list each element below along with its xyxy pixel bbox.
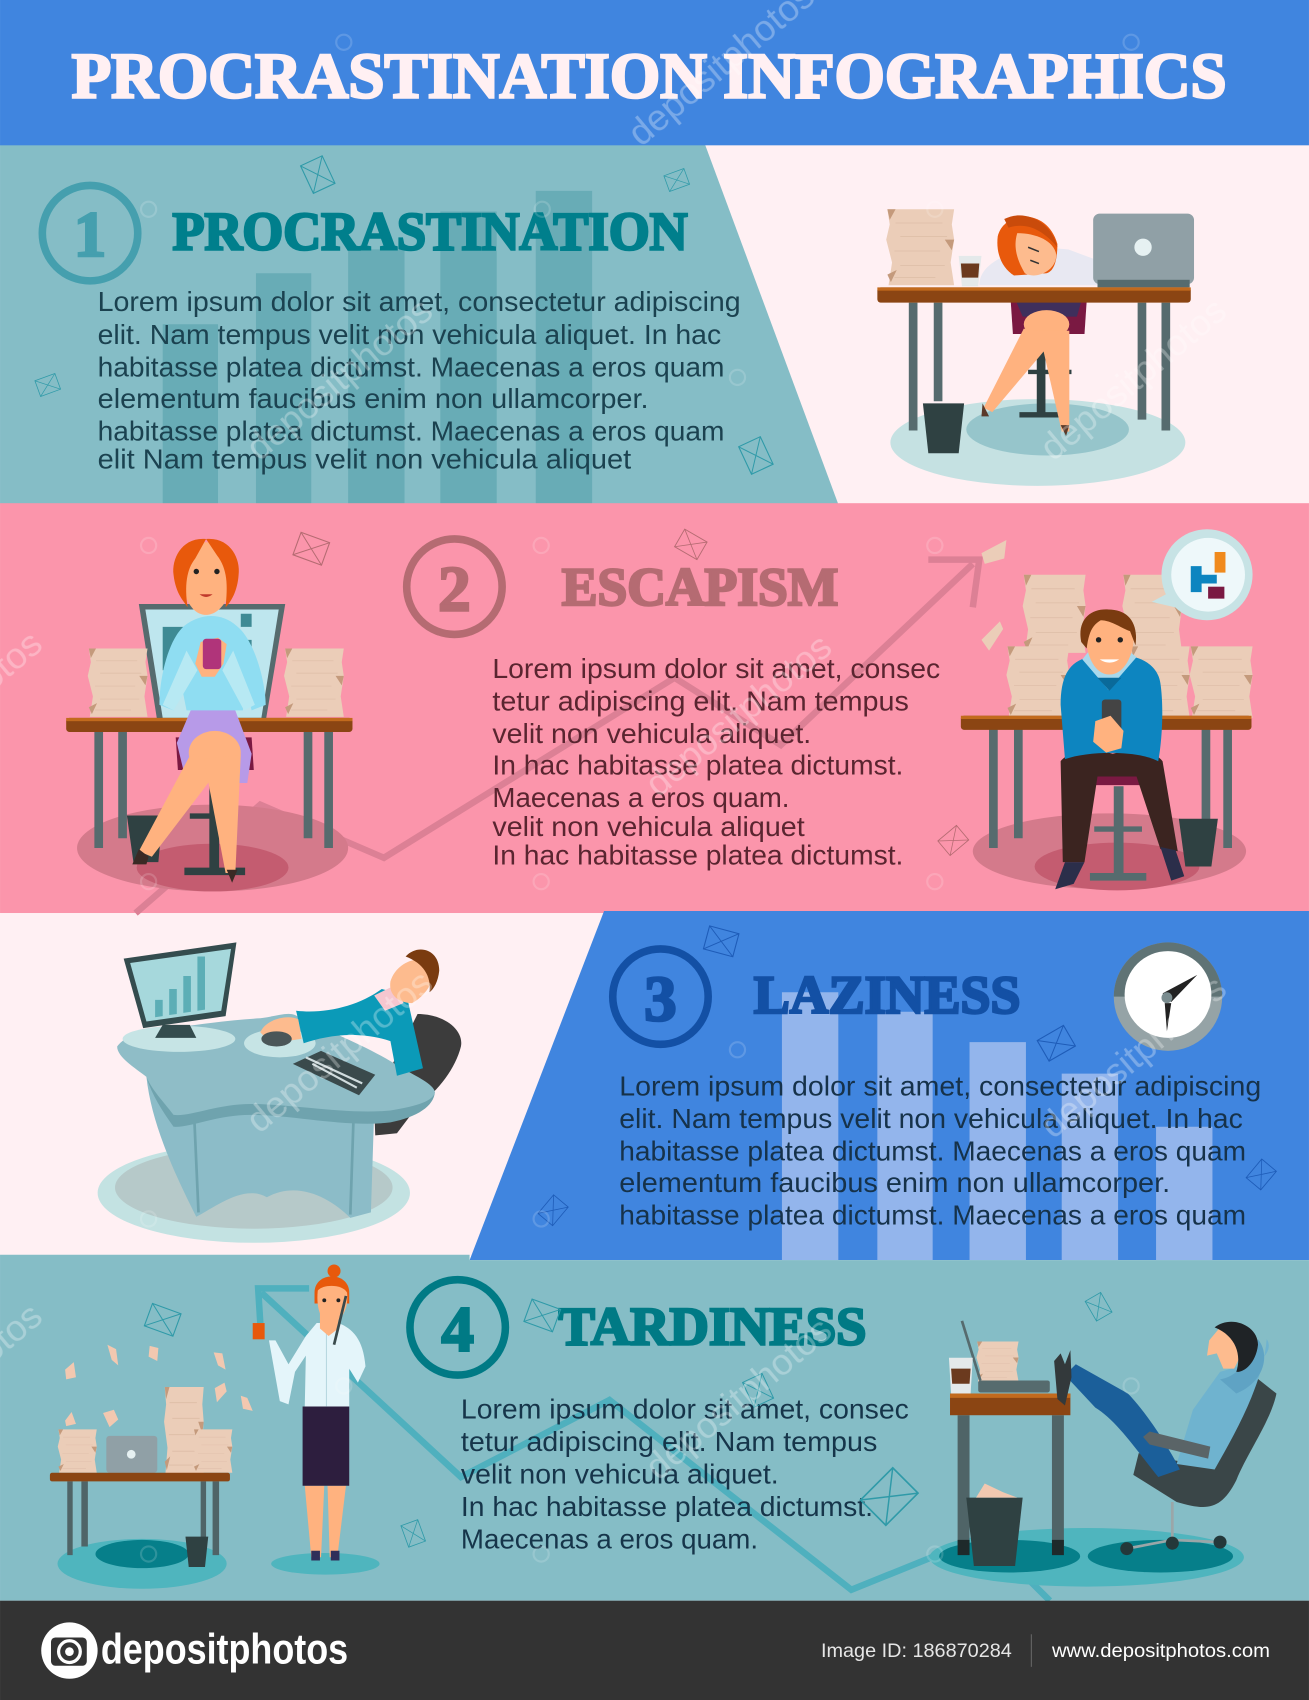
illustration: paper stacks on desk xyxy=(50,1345,253,1589)
section 3 body text: elementum faucibus enim non ullamcorper. xyxy=(619,1166,1170,1198)
section 2 body text: tetur adipiscing elit. Nam tempus xyxy=(492,684,909,716)
section 1 body text: elit. Nam tempus velit non vehicula aliquet. In hac xyxy=(98,318,721,350)
section 2 body text xyxy=(492,652,940,870)
section 1 body text: Lorem ipsum dolor sit amet, consectetur adipiscing xyxy=(98,285,741,317)
section 4 number badge: 4 xyxy=(441,1294,474,1366)
panel: procrastination xyxy=(0,144,1309,504)
watermark cameras xyxy=(141,35,1139,1562)
section 1 body text: habitasse platea dictumst. Maecenas a eros quam xyxy=(98,350,724,382)
watermark text: depositphotos xyxy=(1032,289,1234,468)
section 3 number badge xyxy=(613,949,708,1044)
watermark text: depositphotos xyxy=(637,625,839,804)
footer logo xyxy=(41,1622,348,1679)
section 3 body text: elit. Nam tempus velit non vehicula aliquet. In hac xyxy=(619,1102,1243,1134)
watermark text: depositphotos xyxy=(238,289,440,468)
section 2 body text: velit non vehicula aliquet. xyxy=(492,717,811,749)
panel: laziness xyxy=(0,911,1309,1260)
section 2 number badge: 2 xyxy=(438,554,471,626)
section 1 number badge xyxy=(42,185,138,281)
section 3 body text xyxy=(619,1069,1261,1230)
section 1 heading: PROCRASTINATION xyxy=(172,201,688,261)
section 4 body text: Lorem ipsum dolor sit amet, consec xyxy=(461,1392,909,1424)
illustration: woman asleep at desk xyxy=(877,209,1194,486)
section 1 body text: elit Nam tempus velit non vehicula aliquet xyxy=(98,442,631,474)
section 4 heading: TARDINESS xyxy=(559,1297,867,1357)
section 1 body text: habitasse platea dictumst. Maecenas a eros quam xyxy=(98,414,724,446)
section 2 number badge xyxy=(407,539,502,634)
footer image id: Image ID: 186870284 xyxy=(821,1640,1012,1662)
panel: escapism xyxy=(0,503,1309,913)
section 4 body text: tetur adipiscing elit. Nam tempus xyxy=(461,1425,877,1457)
illustration: woman on phone at desk xyxy=(66,539,352,891)
footer url: www.depositphotos.com xyxy=(1051,1640,1270,1662)
footer logo: depositphotos xyxy=(101,1626,348,1673)
illustration: woman on phone with coffee xyxy=(253,1264,380,1575)
illustration: man asleep at curved desk xyxy=(98,942,461,1243)
section 2 body text: In hac habitasse platea dictumst. xyxy=(492,838,903,870)
section 1 body text: elementum faucibus enim non ullamcorper. xyxy=(98,382,649,414)
footer bar xyxy=(0,1601,1309,1700)
section 3 body text: habitasse platea dictumst. Maecenas a eros quam xyxy=(619,1198,1246,1230)
icon: wall clock xyxy=(1114,942,1222,1051)
section 3 body text: habitasse platea dictumst. Maecenas a eros quam xyxy=(619,1134,1246,1166)
illustration: man with feet on desk xyxy=(929,1321,1276,1587)
watermark text: depositphotos xyxy=(238,962,440,1141)
decorative envelope icons, blue section xyxy=(538,926,1276,1226)
watermark text: depositphotos xyxy=(637,1309,839,1488)
section 2 heading: ESCAPISM xyxy=(562,557,838,617)
section 3 number badge: 3 xyxy=(644,963,677,1035)
section 4 body text: In hac habitasse platea dictumst. xyxy=(461,1490,873,1522)
section 2 body text: velit non vehicula aliquet xyxy=(492,810,805,842)
decorative envelope icons, teal sections xyxy=(35,156,1112,1547)
escapism trend arrow xyxy=(136,560,979,913)
section 1 number badge: 1 xyxy=(74,199,106,271)
section 2 body text: In hac habitasse platea dictumst. xyxy=(492,748,903,780)
section 2 body text: Lorem ipsum dolor sit amet, consec xyxy=(492,652,940,684)
watermark text: depositphotos xyxy=(1032,967,1234,1146)
section 4 body text xyxy=(461,1392,909,1555)
section 1 body text xyxy=(98,285,741,474)
section 3 heading: LAZINESS xyxy=(754,965,1021,1025)
section 4 body text: Maecenas a eros quam. xyxy=(461,1523,758,1555)
section 4 number badge xyxy=(410,1280,505,1375)
panel: tardiness xyxy=(0,1255,1309,1601)
header banner xyxy=(0,0,1309,145)
tardiness trend arrow xyxy=(258,1288,1050,1601)
section 3 body text: Lorem ipsum dolor sit amet, consectetur adipiscing xyxy=(619,1069,1261,1101)
section 2 body text: Maecenas a eros quam. xyxy=(492,781,790,813)
section 4 body text: velit non vehicula aliquet. xyxy=(461,1458,779,1490)
illustration: man on phone with paper stacks xyxy=(961,529,1253,890)
decorative envelope icons, pink section xyxy=(293,529,969,856)
title: PROCRASTINATION INFOGRAPHICS xyxy=(72,41,1227,113)
